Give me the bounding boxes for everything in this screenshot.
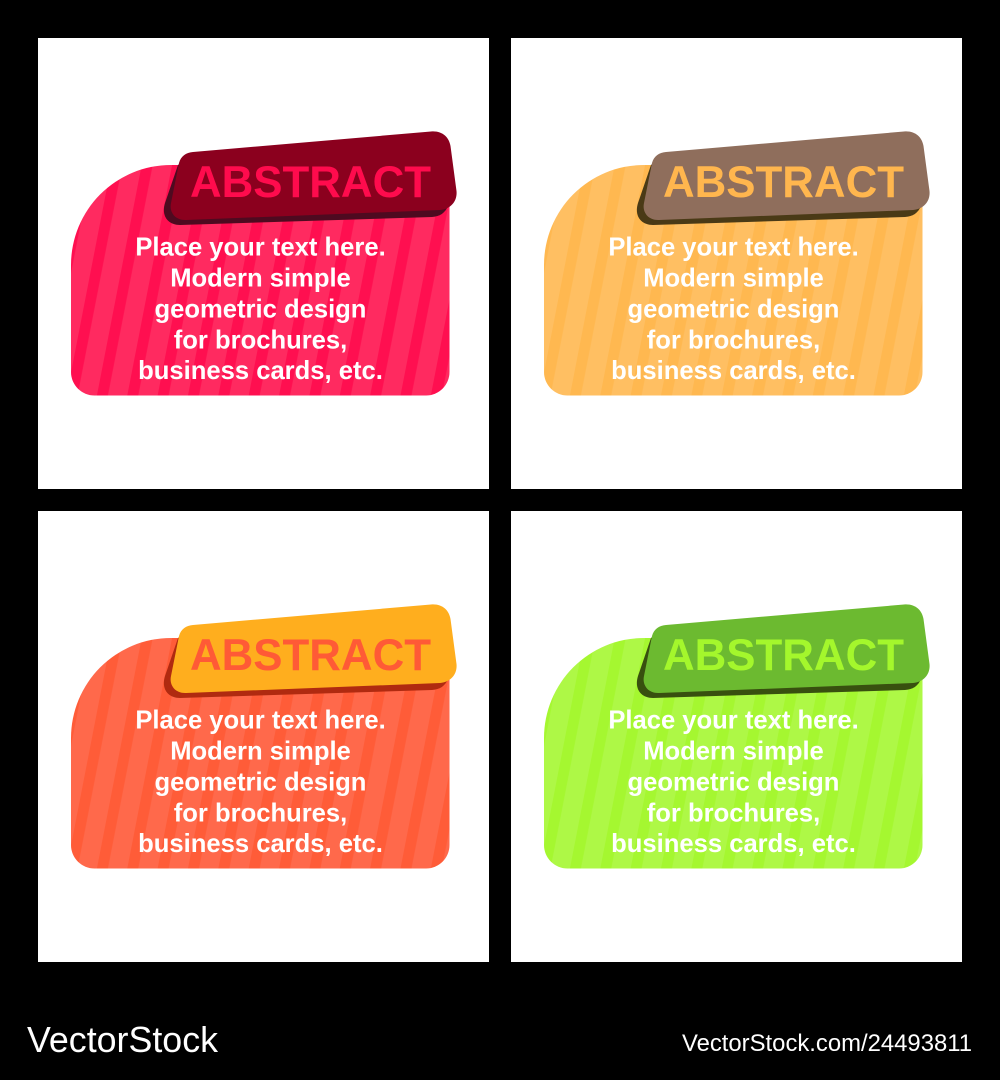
coral body text <box>135 707 386 858</box>
lime tab <box>644 604 930 693</box>
crimson body text: Modern simple <box>170 265 351 293</box>
crimson body text <box>135 234 386 385</box>
lime body text: for brochures, <box>647 799 820 827</box>
lime tab shadow <box>637 628 921 698</box>
crimson body text: business cards, etc. <box>138 357 383 385</box>
panel: lime card <box>511 511 962 962</box>
amber tab shadow <box>637 155 921 225</box>
crimson body text: for brochures, <box>174 326 347 354</box>
amber body text: for brochures, <box>647 326 820 354</box>
watermark url: VectorStock.com/24493811 <box>682 1030 972 1057</box>
coral heading: ABSTRACT <box>190 631 431 680</box>
crimson heading: ABSTRACT <box>190 158 431 207</box>
amber body text: business cards, etc. <box>611 357 856 385</box>
panel: crimson card <box>38 38 489 489</box>
coral body text: business cards, etc. <box>138 830 383 858</box>
amber body text: Place your text here. <box>608 234 859 262</box>
lime body text: Place your text here. <box>608 707 859 735</box>
amber body text <box>608 234 859 385</box>
coral striped body <box>71 638 450 868</box>
lime body text: business cards, etc. <box>611 830 856 858</box>
lime body text: Modern simple <box>643 738 824 766</box>
lime heading: ABSTRACT <box>663 631 904 680</box>
crimson tab shadow <box>164 155 448 225</box>
panel: coral card <box>38 511 489 962</box>
crimson striped body <box>71 165 450 396</box>
watermark logo: VectorStock <box>27 1019 219 1060</box>
coral tab <box>171 604 457 693</box>
amber striped body <box>544 165 922 396</box>
lime body text <box>608 707 859 858</box>
crimson tab <box>171 131 457 220</box>
crimson body text: geometric design <box>155 296 366 324</box>
amber body text: geometric design <box>628 296 839 324</box>
lime body text: geometric design <box>628 769 839 797</box>
lime striped body <box>544 638 922 868</box>
coral body text: Place your text here. <box>135 707 386 735</box>
amber heading: ABSTRACT <box>663 158 904 207</box>
coral body text: Modern simple <box>170 738 351 766</box>
panel: amber card <box>511 38 962 489</box>
coral tab shadow <box>164 628 448 698</box>
coral body text: for brochures, <box>174 799 347 827</box>
amber tab <box>644 131 930 220</box>
coral body text: geometric design <box>155 769 366 797</box>
crimson body text: Place your text here. <box>135 234 386 262</box>
amber body text: Modern simple <box>643 265 824 293</box>
